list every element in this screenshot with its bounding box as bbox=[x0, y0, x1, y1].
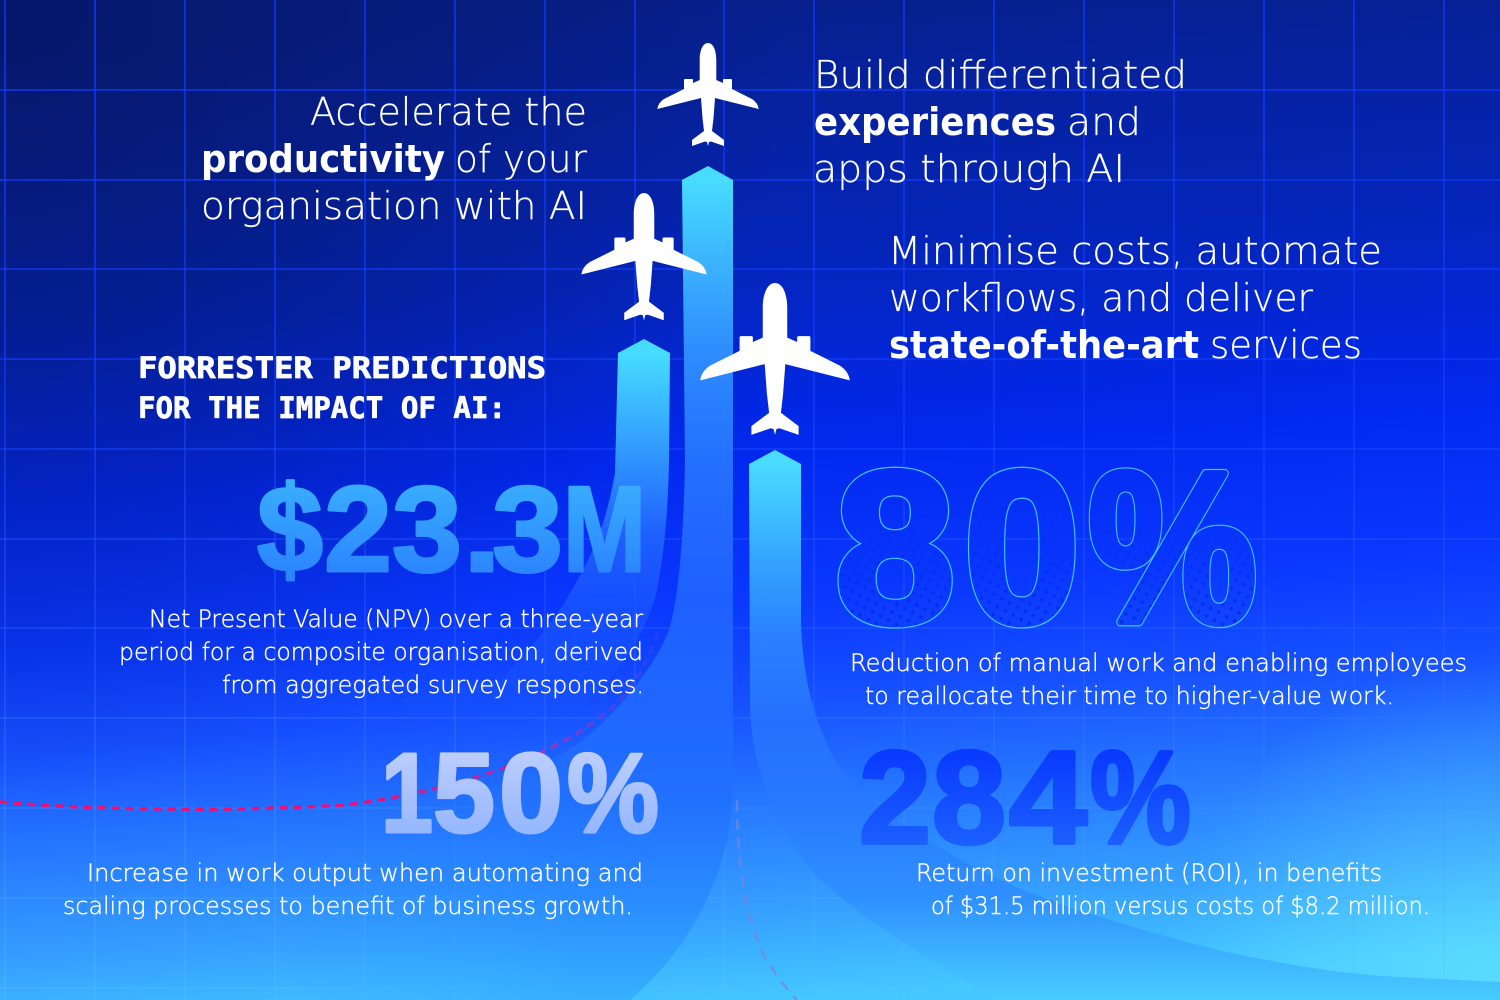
text block: differentiated experiences bbox=[813, 53, 1187, 191]
text block: accelerate productivity bbox=[201, 90, 587, 228]
stat: 284% bbox=[859, 724, 1191, 871]
text block: differentiated experiences: and bbox=[1067, 100, 1141, 144]
text block: differentiated experiences: experiences bbox=[814, 100, 1056, 144]
trail: centre plane contrail bbox=[434, 166, 733, 1000]
heading: Forrester predictions: FOR THE IMPACT OF AI: bbox=[138, 391, 506, 425]
text block: ROI description bbox=[916, 859, 1430, 920]
text block: accelerate productivity: organisation with AI bbox=[201, 184, 587, 228]
stat: 284%: 8 bbox=[932, 724, 1006, 871]
text block: NPV description bbox=[119, 605, 644, 699]
dashed flight path: red bbox=[0, 627, 660, 809]
dashed flight path: lower bbox=[737, 800, 797, 1000]
stat: 80% outlined bbox=[837, 466, 1256, 629]
text block: accelerate productivity: productivity bbox=[201, 137, 445, 181]
stat: 150%: 5 bbox=[433, 730, 495, 856]
text block: minimise costs: Minimise costs, automate bbox=[888, 229, 1382, 273]
text block: differentiated experiences: apps through AI bbox=[813, 147, 1125, 191]
text block: ROI description: Return on investment (ROI), in benefits bbox=[916, 859, 1382, 887]
text block: work output description bbox=[63, 859, 643, 920]
stat: $23.3M: 2 bbox=[324, 461, 392, 597]
text block: work output description: scaling processes to benefit of business growth. bbox=[63, 892, 633, 920]
text block: manual work description bbox=[850, 649, 1467, 710]
stat: 284%: 2 bbox=[859, 724, 931, 871]
text block: accelerate productivity: of your bbox=[455, 137, 587, 181]
text block: minimise costs: services bbox=[1210, 323, 1362, 367]
stat: $23.3M: 3 bbox=[492, 461, 563, 597]
trail: right plane contrail bbox=[749, 450, 1500, 1000]
text block: differentiated experiences: Build differentiated bbox=[814, 53, 1187, 97]
trail: left plane contrail bbox=[400, 339, 670, 770]
text block: NPV description: period for a composite organisation, derived bbox=[119, 638, 643, 666]
stat: 284%: 4 bbox=[1009, 724, 1087, 871]
icon: lower plane bbox=[700, 283, 850, 435]
stat: $23.3M: . bbox=[463, 461, 501, 597]
heading: Forrester predictions bbox=[138, 351, 546, 425]
stat: $23.3M: M bbox=[563, 461, 646, 597]
text block: work output description: Increase in work output when automating and bbox=[87, 859, 643, 887]
icon: middle plane bbox=[581, 193, 707, 320]
text block: minimise costs: workflows, and deliver bbox=[889, 276, 1313, 320]
text block: manual work description: Reduction of manual work and enabling employees bbox=[850, 649, 1467, 677]
text block: ROI description: of $31.5 million versus costs of $8.2 million. bbox=[931, 892, 1430, 920]
stat: 150%: 0 bbox=[499, 730, 563, 856]
stat: $23.3M: 3 bbox=[392, 461, 462, 597]
stat: 150% bbox=[381, 730, 659, 856]
heading: Forrester predictions: FORRESTER PREDICTIONS bbox=[138, 351, 546, 385]
icon: top plane bbox=[657, 43, 759, 146]
text block: NPV description: from aggregated survey responses. bbox=[222, 671, 644, 699]
stat: $23.3M: $ bbox=[257, 461, 323, 597]
text block: manual work description: to reallocate their time to higher-value work. bbox=[865, 682, 1394, 710]
text block: minimise costs: state-of-the-art bbox=[889, 323, 1199, 367]
stat: 150%: % bbox=[567, 730, 659, 856]
text block: NPV description: Net Present Value (NPV) over a three-year bbox=[149, 605, 643, 633]
stat: 284%: % bbox=[1090, 724, 1191, 871]
text block: accelerate productivity: Accelerate the bbox=[310, 90, 587, 134]
stat: $23.3M bbox=[257, 461, 646, 597]
text block: minimise costs bbox=[888, 229, 1382, 367]
stat: 150%: 1 bbox=[381, 730, 433, 856]
